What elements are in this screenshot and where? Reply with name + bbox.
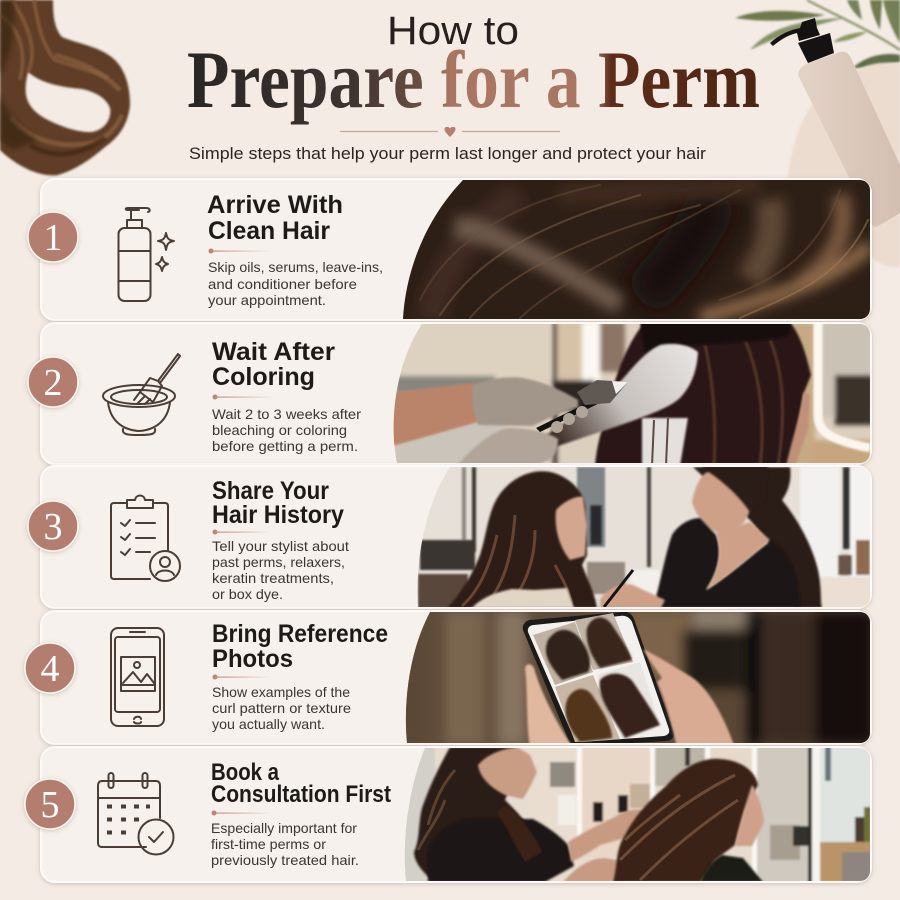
text: step 4: Show examples of the xyxy=(212,684,350,700)
title: prepare for a perm: Prepare for a Perm xyxy=(187,34,760,125)
decoration: towel xyxy=(788,63,900,267)
photo: stylist applying color xyxy=(385,322,875,466)
text: step 5: first-time perms or xyxy=(211,836,326,852)
dyed fan section xyxy=(545,344,698,447)
number badge 2 xyxy=(28,357,78,407)
text: step 4 xyxy=(212,620,388,732)
client hair xyxy=(447,471,597,608)
photo: phone with curl references xyxy=(400,608,875,748)
text: step 5 xyxy=(211,759,391,868)
number badge 5 xyxy=(25,779,75,829)
text: step 2: bleaching or coloring xyxy=(212,422,347,438)
heart divider xyxy=(340,127,560,137)
text: step 2 xyxy=(212,338,361,454)
stylist face xyxy=(478,747,537,799)
icon: phone with image xyxy=(111,628,164,726)
subtitle: Simple steps that help your perm last longer and protect your hair xyxy=(189,144,706,163)
icon: bowl and brush xyxy=(103,354,180,435)
client hair xyxy=(613,759,758,882)
panel 2: wait after coloring xyxy=(28,322,875,466)
text: step 1: Skip oils, serums, leave-ins, xyxy=(208,259,383,275)
decoration: pump bottle xyxy=(770,18,900,227)
text: step 2: Wait After xyxy=(212,338,335,366)
number badge 4 xyxy=(25,643,75,693)
photo: consultation in salon xyxy=(400,746,875,884)
stylist hair and ponytail xyxy=(693,467,822,608)
panel 4: bring reference photos xyxy=(25,608,875,748)
phone xyxy=(523,612,674,746)
number badge 5: 5 xyxy=(40,784,60,826)
text: step 3 xyxy=(212,477,349,602)
title block xyxy=(187,9,760,163)
text: step 5: Book a xyxy=(211,759,280,786)
stylist hair xyxy=(412,748,525,878)
text: step 1: Arrive With xyxy=(207,191,343,219)
text: step 5: Especially important for xyxy=(211,820,357,836)
arm and gloves xyxy=(394,382,478,446)
stylist face xyxy=(692,470,750,535)
brush xyxy=(536,404,598,432)
icon: clipboard with person xyxy=(111,496,180,581)
decoration: leaves top right xyxy=(735,0,900,68)
text: step 2: Wait 2 to 3 weeks after xyxy=(212,406,361,422)
client face xyxy=(735,785,764,846)
photo: stylist and client xyxy=(415,465,875,610)
text: step 2: before getting a perm. xyxy=(212,438,358,454)
number badge 1: 1 xyxy=(44,217,62,259)
text: step 3: or box dye. xyxy=(212,586,283,602)
fingers xyxy=(551,406,588,433)
text: step 5: Consultation First xyxy=(211,781,391,808)
arms and hands xyxy=(568,810,649,862)
stylist hand and pen xyxy=(600,584,665,610)
text: step 3: Tell your stylist about xyxy=(212,538,349,554)
text: step 5: previously treated hair. xyxy=(211,852,359,868)
panel 5: book a consultation first xyxy=(25,746,875,884)
text: step 1: your appointment. xyxy=(208,292,326,308)
decoration: hair curl top left xyxy=(0,0,130,175)
text: step 2: Coloring xyxy=(212,363,315,391)
right hand xyxy=(643,649,735,748)
number badge 3 xyxy=(28,501,78,551)
text: step 4: Photos xyxy=(212,645,293,673)
text: step 4: you actually want. xyxy=(212,716,325,732)
stylist top xyxy=(428,819,574,882)
text: step 1 xyxy=(207,191,383,308)
panel 3: share your hair history xyxy=(28,465,875,610)
number badge 1 xyxy=(28,212,78,262)
text: step 1: Clean Hair xyxy=(208,217,330,245)
text: step 3: past perms, relaxers, xyxy=(212,554,345,570)
mirror frame xyxy=(818,322,870,448)
text: step 4: curl pattern or texture xyxy=(212,700,351,716)
title: how to: How to xyxy=(387,9,519,53)
stylist hair over top xyxy=(497,805,542,862)
number badge 2: 2 xyxy=(44,362,62,404)
text: step 1: and conditioner before xyxy=(208,276,357,292)
number badge 4: 4 xyxy=(40,648,60,690)
text: step 3: keratin treatments, xyxy=(212,570,334,586)
icon: pump bottle with sparkles xyxy=(118,208,174,301)
number badge 3: 3 xyxy=(44,506,62,548)
photo: glossy brown hair xyxy=(400,178,875,323)
hair xyxy=(595,322,811,466)
text: step 4: Bring Reference xyxy=(212,620,388,648)
icon: calendar with check xyxy=(98,773,174,854)
panel 1: arrive with clean hair xyxy=(28,178,875,323)
text: step 3: Hair History xyxy=(212,501,344,529)
client face xyxy=(556,497,587,560)
client sweater xyxy=(472,588,574,608)
left hand xyxy=(525,664,573,748)
text: step 3: Share Your xyxy=(212,477,329,505)
client cape xyxy=(700,855,763,882)
stylist top xyxy=(653,518,800,608)
